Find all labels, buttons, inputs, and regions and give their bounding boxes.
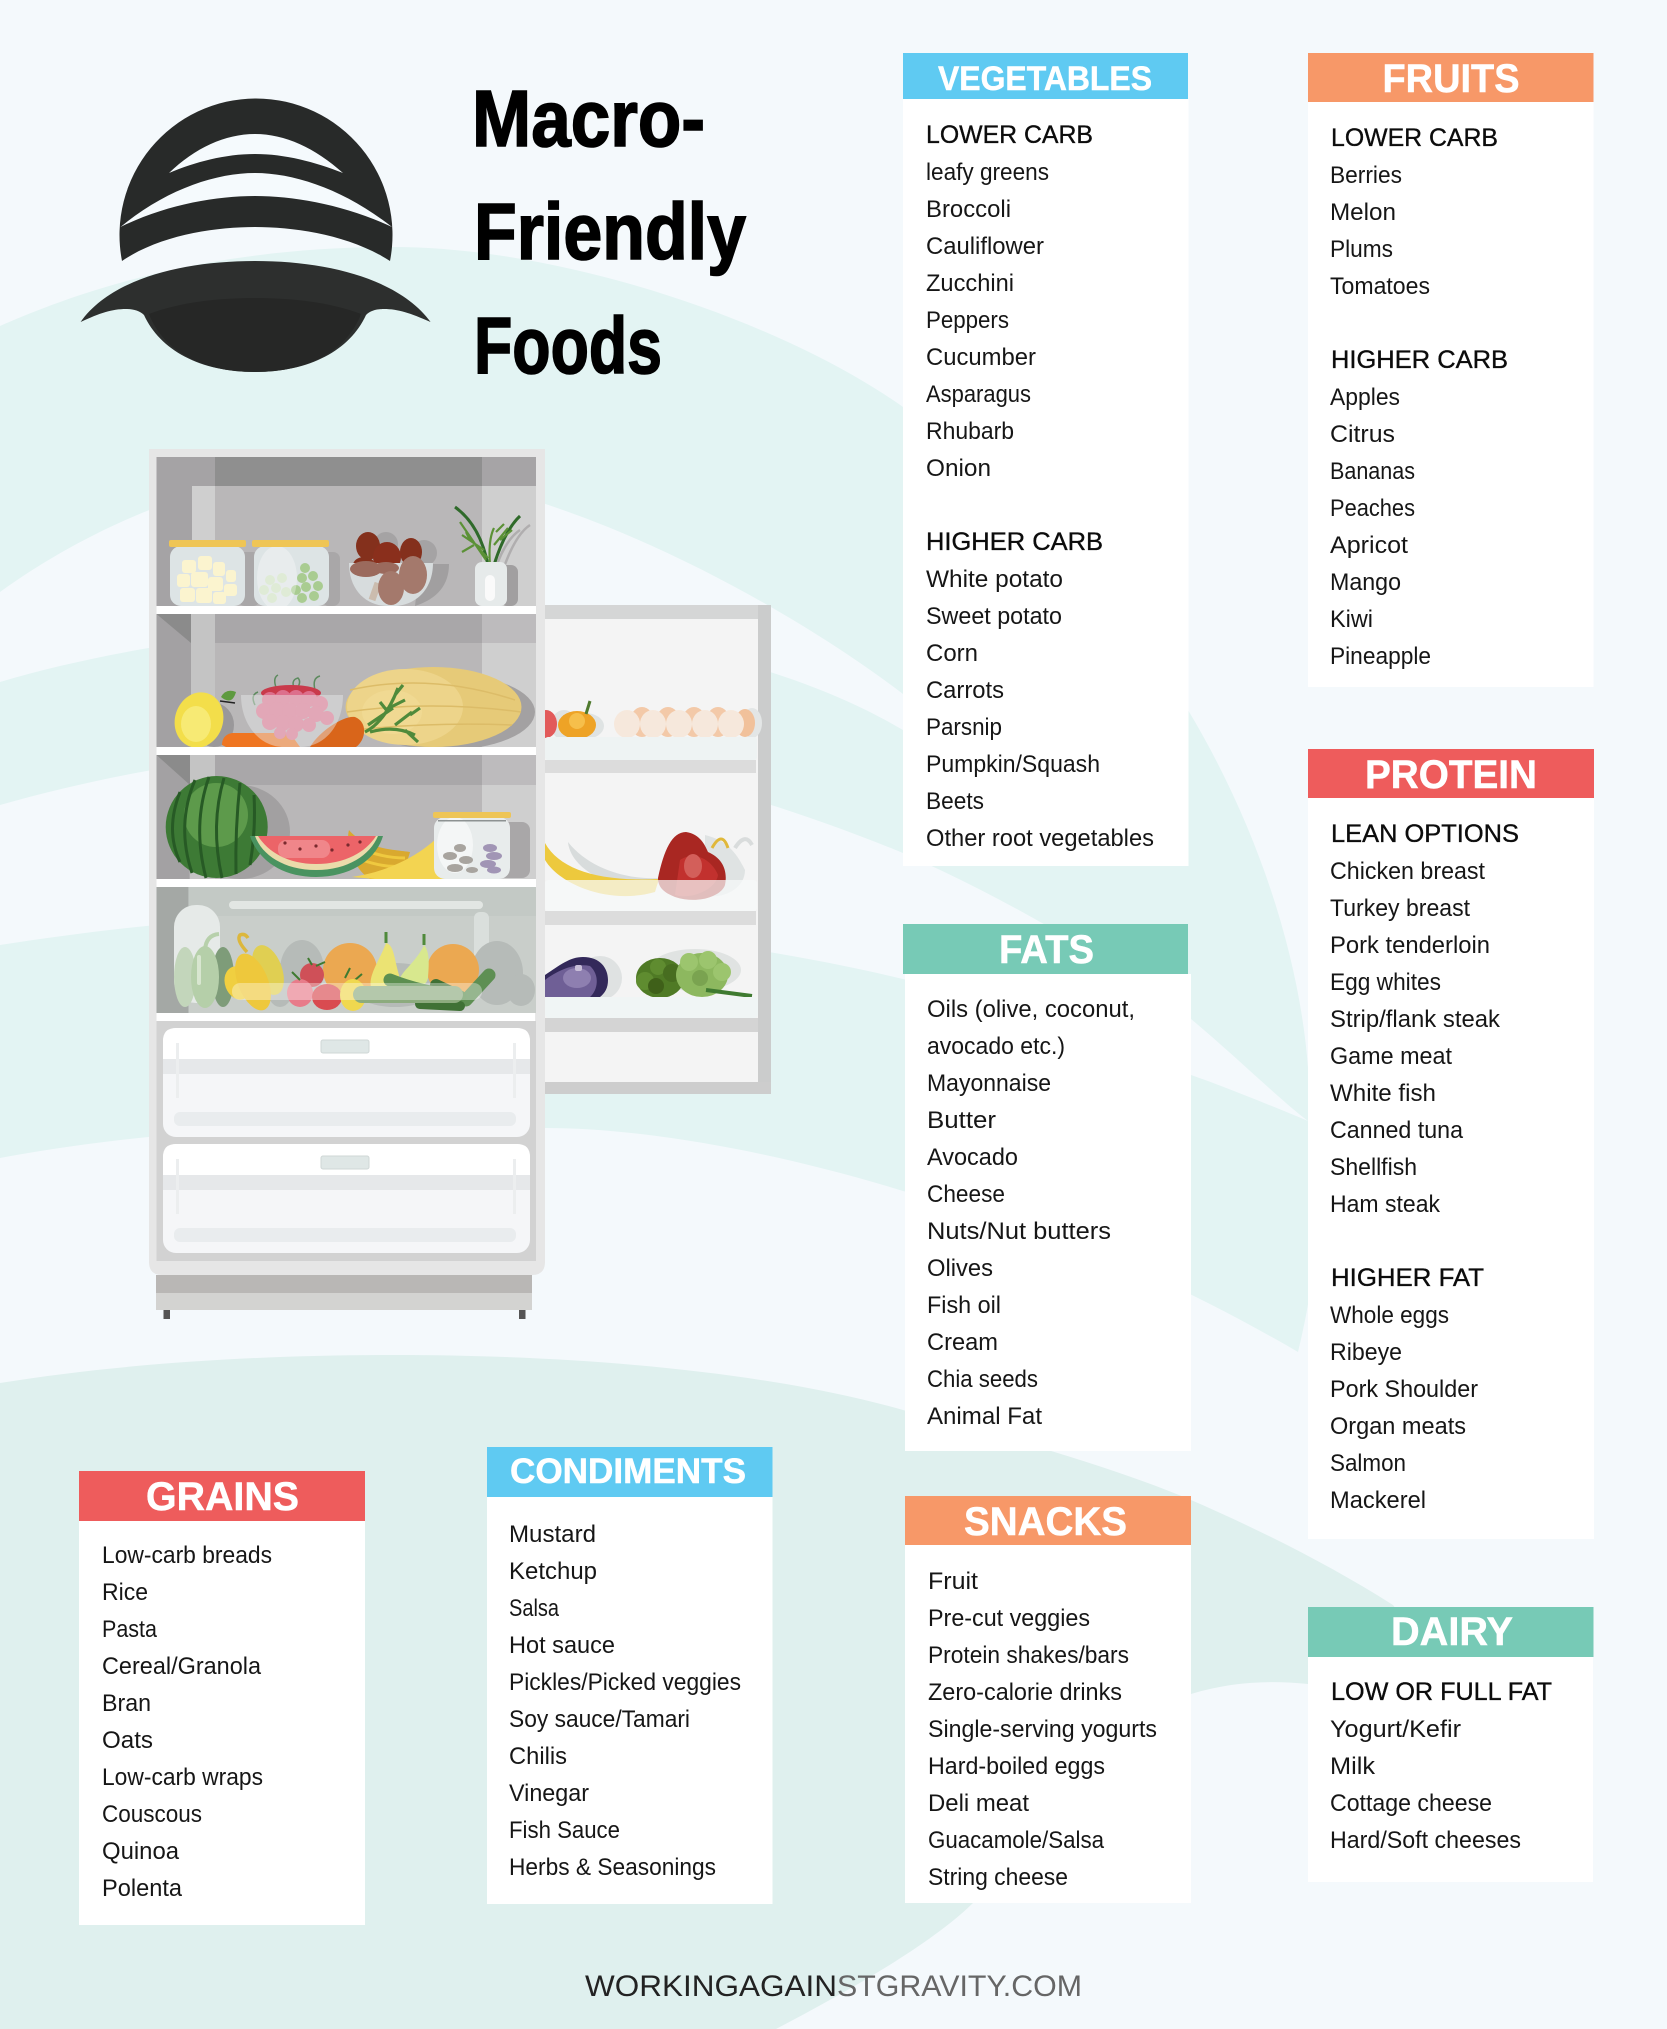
vase: herbs <box>455 507 530 606</box>
heading: condiments: CONDIMENTS <box>510 1452 746 1491</box>
heading: grains: GRAINS <box>146 1475 299 1519</box>
list: snacks: Protein shakes/bars <box>928 1642 1129 1669</box>
list: higher carb fruits: Apples <box>1330 384 1400 411</box>
panel: vegetables <box>903 53 1188 866</box>
list: fats: Nuts/Nut butters <box>927 1218 1111 1245</box>
list: lower carb vegetables: Rhubarb <box>926 418 1014 445</box>
list: fats: avocado etc.) <box>927 1033 1065 1060</box>
list: lower carb fruits: Berries <box>1330 162 1402 189</box>
food: watermelon <box>166 776 290 879</box>
list: condiments: Chilis <box>509 1743 567 1770</box>
list: lean proteins: Chicken breast <box>1330 858 1485 885</box>
food: lemon <box>168 686 236 754</box>
list: lean proteins: Egg whites <box>1330 969 1441 996</box>
shadow blobs <box>266 940 535 1007</box>
heading: dairy: DAIRY <box>1391 1610 1513 1654</box>
subheading: lean options: LEAN OPTIONS <box>1331 820 1519 848</box>
list: lower carb vegetables: Cucumber <box>926 344 1036 371</box>
list: grains: Bran <box>102 1690 151 1717</box>
heading: grains <box>79 1471 365 1521</box>
list: fats: Cream <box>927 1329 998 1356</box>
list: lean proteins: Turkey breast <box>1330 895 1470 922</box>
list: snacks: Single-serving yogurts <box>928 1716 1157 1743</box>
list: higher fat proteins: Pork Shoulder <box>1330 1376 1478 1403</box>
list: dairy: Milk <box>1330 1753 1376 1780</box>
list: higher carb vegetables: Other root vegetables <box>926 825 1154 852</box>
list: snacks: String cheese <box>928 1864 1068 1891</box>
compartment 2 <box>156 614 536 754</box>
food: melon <box>346 667 535 750</box>
fridge door <box>535 605 771 1094</box>
list: higher carb fruits: Mango <box>1330 569 1401 596</box>
panel: fats <box>903 924 1191 1451</box>
door food: eggs <box>614 707 762 738</box>
door food: banana <box>568 842 660 890</box>
heading: vegetables: VEGETABLES <box>938 60 1152 98</box>
list: snacks: Pre-cut veggies <box>928 1605 1090 1632</box>
list: higher carb vegetables: Parsnip <box>926 714 1002 741</box>
list: grains: Polenta <box>102 1875 183 1902</box>
compartment 1 <box>156 457 536 610</box>
door food: apple and orange <box>535 701 604 740</box>
list: lower carb vegetables: Peppers <box>926 307 1009 334</box>
list: lean proteins: Canned tuna <box>1330 1117 1464 1144</box>
list: lean proteins: Game meat <box>1330 1043 1452 1070</box>
list: lean proteins: Shellfish <box>1330 1154 1417 1181</box>
subheading: lower carb: LOWER CARB <box>926 121 1093 149</box>
heading: vegetables <box>903 53 1188 99</box>
list: lean proteins: Ham steak <box>1330 1191 1441 1218</box>
illustration: open refrigerator <box>149 449 771 1319</box>
bowl: mushrooms <box>349 532 449 606</box>
food: pears <box>371 932 429 994</box>
list: snacks: Fruit <box>928 1568 978 1595</box>
list: lower carb vegetables: Onion <box>926 455 991 482</box>
list: grains: Low-carb wraps <box>102 1764 263 1791</box>
compartment 4 <box>156 887 536 1015</box>
list: grains: Cereal/Granola <box>102 1653 262 1680</box>
list: grains: Low-carb breads <box>102 1542 272 1569</box>
subheading: higher fat: HIGHER FAT <box>1331 1264 1484 1292</box>
list: higher carb fruits: Pineapple <box>1330 643 1431 670</box>
food: carrots <box>222 717 364 747</box>
panel: grains <box>79 1471 365 1925</box>
heading: fruits <box>1308 53 1594 102</box>
list: higher carb vegetables: Carrots <box>926 677 1004 704</box>
list: condiments: Vinegar <box>509 1780 589 1807</box>
list: fats: Fish oil <box>927 1292 1001 1319</box>
title: Friendly <box>474 187 746 276</box>
panel: dairy <box>1308 1607 1594 1882</box>
list: lower carb vegetables: leafy greens <box>926 159 1049 186</box>
list: fats: Olives <box>927 1255 993 1282</box>
heading: protein <box>1308 749 1594 798</box>
list: lower carb vegetables: Asparagus <box>926 381 1031 408</box>
list: fats: Cheese <box>927 1181 1005 1208</box>
list: higher carb vegetables: Pumpkin/Squash <box>926 751 1100 778</box>
list: higher fat proteins: Mackerel <box>1330 1487 1426 1514</box>
heading: dairy <box>1308 1607 1594 1657</box>
heading: fats: FATS <box>999 928 1094 972</box>
heading: condiments <box>487 1447 772 1497</box>
list: lean proteins: Strip/flank steak <box>1330 1006 1501 1033</box>
food: oranges <box>323 943 479 997</box>
list: grains: Rice <box>102 1579 148 1606</box>
list: fats: Oils (olive, coconut, <box>927 996 1135 1023</box>
list: fats: Avocado <box>927 1144 1018 1171</box>
list: condiments: Fish Sauce <box>509 1817 620 1844</box>
heading: snacks <box>905 1496 1191 1545</box>
title <box>472 74 746 390</box>
list: lower carb fruits: Melon <box>1330 199 1396 226</box>
icon: logo <box>81 98 431 372</box>
list: dairy: Yogurt/Kefir <box>1330 1716 1461 1743</box>
fridge base and feet <box>156 1275 532 1319</box>
list: fats: Butter <box>927 1107 996 1134</box>
heading: protein: PROTEIN <box>1365 753 1537 797</box>
heading: snacks: SNACKS <box>964 1500 1127 1544</box>
list: higher carb fruits: Bananas <box>1330 458 1415 485</box>
drawer 1 <box>163 1028 530 1137</box>
door food: eggplant <box>545 956 622 1000</box>
list: snacks: Zero-calorie drinks <box>928 1679 1122 1706</box>
list: lean proteins: White fish <box>1330 1080 1436 1107</box>
list: fats: Animal Fat <box>927 1403 1042 1430</box>
list: higher fat proteins: Ribeye <box>1330 1339 1402 1366</box>
list: lower carb vegetables: Broccoli <box>926 196 1011 223</box>
food: cucumbers <box>353 975 489 1006</box>
subheading: higher carb: HIGHER CARB <box>926 528 1103 556</box>
list: lower carb vegetables: Cauliflower <box>926 233 1044 260</box>
list: grains: Couscous <box>102 1801 202 1828</box>
door food: red pepper <box>658 832 752 900</box>
list: fats: Chia seeds <box>927 1366 1038 1393</box>
list: snacks: Deli meat <box>928 1790 1029 1817</box>
list: condiments: Mustard <box>509 1521 596 1548</box>
heading: fats <box>903 924 1188 974</box>
list: lower carb vegetables: Zucchini <box>926 270 1014 297</box>
list: dairy: Cottage cheese <box>1330 1790 1492 1817</box>
list: condiments: Ketchup <box>509 1558 597 1585</box>
jar: peas <box>252 540 340 610</box>
food: green pepper <box>174 934 234 1008</box>
title: Macro- <box>472 74 705 163</box>
panel: protein <box>1308 749 1594 1539</box>
list: lower carb fruits: Plums <box>1330 236 1393 263</box>
food: tomatoes <box>287 958 362 1010</box>
list: higher carb fruits: Apricot <box>1330 532 1408 559</box>
list: higher fat proteins: Salmon <box>1330 1450 1406 1477</box>
list: condiments: Herbs & Seasonings <box>509 1854 716 1881</box>
panel: fruits <box>1308 53 1594 687</box>
footer website: WORKINGAGAIN STGRAVITY.COM <box>585 1970 1082 2003</box>
jar: beans <box>433 812 530 879</box>
heading: fruits: FRUITS <box>1382 57 1520 101</box>
fridge body <box>149 449 545 1275</box>
list: higher carb vegetables: Beets <box>926 788 984 815</box>
title: Foods <box>474 301 662 390</box>
panel: snacks <box>905 1496 1191 1903</box>
list: grains: Oats <box>102 1727 153 1754</box>
list: dairy: Hard/Soft cheeses <box>1330 1827 1521 1854</box>
subheading: low or full fat: LOW OR FULL FAT <box>1331 1678 1552 1706</box>
subheading: lower carb: LOWER CARB <box>1331 124 1498 152</box>
drawer 2 <box>163 1144 530 1253</box>
list: condiments: Soy sauce/Tamari <box>509 1706 690 1733</box>
compartment 3 <box>156 755 536 879</box>
food: watermelon slice <box>250 836 383 877</box>
list: lean proteins: Pork tenderloin <box>1330 932 1490 959</box>
food: bowl with raspberries <box>241 675 343 747</box>
list: higher carb vegetables: Corn <box>926 640 978 667</box>
list: snacks: Guacamole/Salsa <box>928 1827 1105 1854</box>
panel: condiments <box>487 1447 772 1904</box>
food: yellow pepper <box>220 934 290 1015</box>
list: higher fat proteins: Organ meats <box>1330 1413 1466 1440</box>
subheading: higher carb: HIGHER CARB <box>1331 346 1508 374</box>
door food: grapes and broccoli <box>636 949 752 998</box>
list: snacks: Hard-boiled eggs <box>928 1753 1105 1780</box>
list: higher fat proteins: Whole eggs <box>1330 1302 1449 1329</box>
jar: cauliflower <box>169 540 260 606</box>
list: grains: Pasta <box>102 1616 158 1643</box>
list: fats: Mayonnaise <box>927 1070 1051 1097</box>
list: grains: Quinoa <box>102 1838 180 1865</box>
list: higher carb vegetables: White potato <box>926 566 1063 593</box>
list: lower carb fruits: Tomatoes <box>1330 273 1430 300</box>
list: condiments: Hot sauce <box>509 1632 615 1659</box>
list: higher carb fruits: Kiwi <box>1330 606 1373 633</box>
list: higher carb vegetables: Sweet potato <box>926 603 1062 630</box>
food: parsley sprig <box>365 685 420 742</box>
list: higher carb fruits: Peaches <box>1330 495 1415 522</box>
list: higher carb fruits: Citrus <box>1330 421 1395 448</box>
list: condiments: Salsa <box>509 1595 560 1622</box>
list: condiments: Pickles/Picked veggies <box>509 1669 741 1696</box>
food: banana <box>348 822 451 879</box>
